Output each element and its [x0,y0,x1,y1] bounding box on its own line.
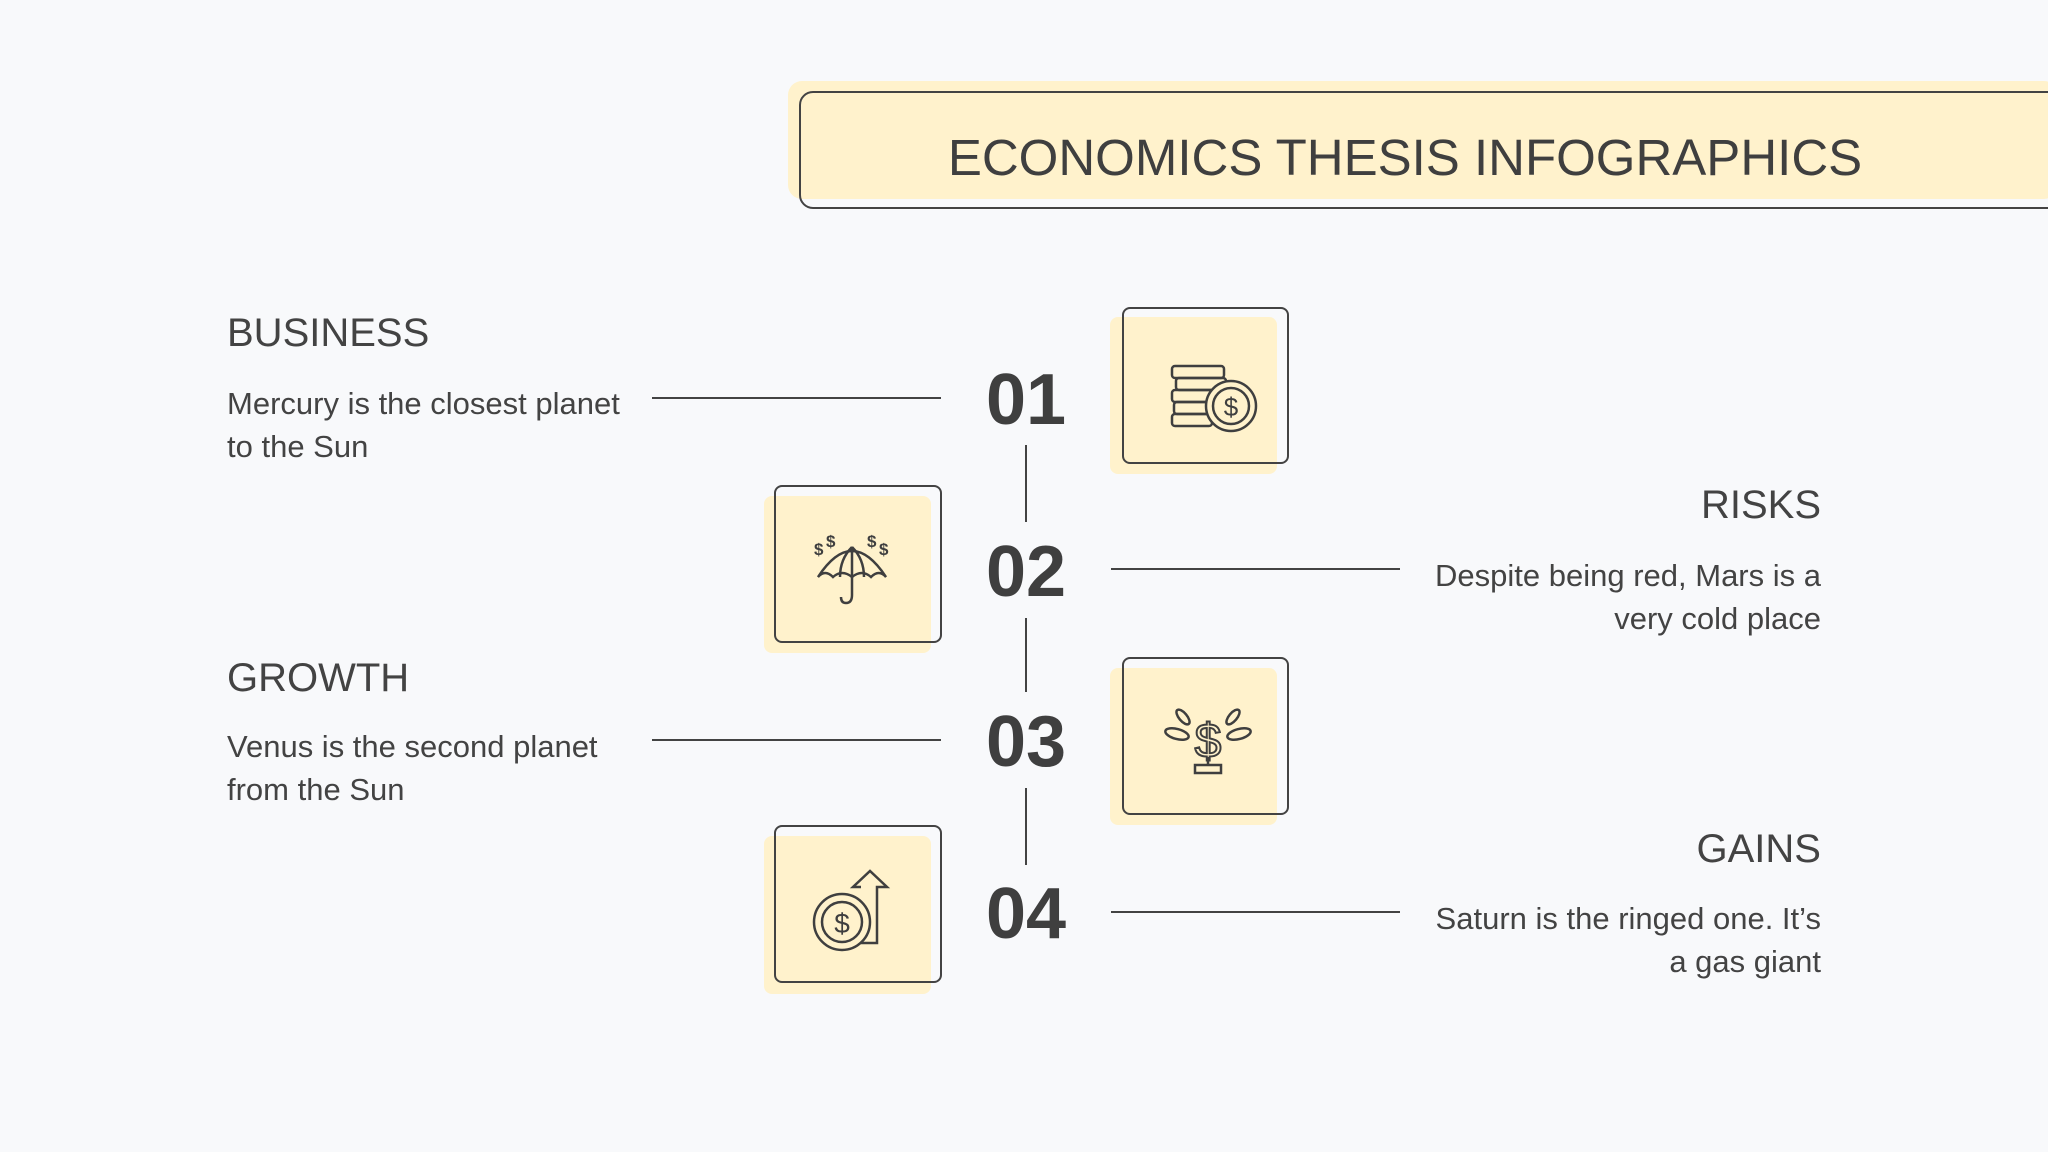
icon box 01: coins [1110,307,1289,474]
icon: coin growth arrow: $ [834,908,850,939]
text business [227,386,620,464]
icon: coin stack: $ [1224,392,1239,422]
text business: to the Sun [227,429,368,464]
icon box 02: umbrella [764,485,942,653]
icon: dollar plant: $ [1195,715,1221,768]
text risks [1435,558,1821,636]
heading gains: GAINS [1697,827,1821,871]
icon: dollar plant [1164,708,1252,774]
icon box 03: money tree [1110,657,1289,825]
heading business: BUSINESS [227,311,429,355]
text growth [227,729,598,807]
icon: coin stack [1170,364,1258,432]
number 04: 04 [986,874,1066,954]
text gains: a gas giant [1669,944,1821,979]
number 02: 02 [986,532,1066,612]
title text: ECONOMICS THESIS INFOGRAPHICS [948,129,1862,186]
panel: business [227,311,620,464]
number 03: 03 [986,702,1066,782]
panel: risks [1435,483,1821,636]
heading growth: GROWTH [227,656,409,700]
text growth: from the Sun [227,772,404,807]
panel: gains [1436,827,1821,979]
text growth: Venus is the second planet [227,729,598,764]
text risks: very cold place [1614,601,1821,636]
text business: Mercury is the closest planet [227,386,620,421]
icon: coin growth arrow [812,869,890,952]
icon: umbrella with dollars [814,532,889,604]
text gains [1436,901,1821,979]
text risks: Despite being red, Mars is a [1435,558,1821,593]
icon: umbrella with dollars: $ [867,532,877,551]
text gains: Saturn is the ringed one. It’s [1436,901,1821,936]
icon: umbrella with dollars: $ [879,540,889,559]
title banner [788,81,2048,209]
heading risks: RISKS [1701,483,1821,527]
panel: growth [227,656,598,807]
icon: umbrella with dollars: $ [814,540,824,559]
icon: umbrella with dollars: $ [826,532,836,551]
number 01: 01 [986,360,1066,440]
icon box 04: coin with arrow [764,825,942,994]
